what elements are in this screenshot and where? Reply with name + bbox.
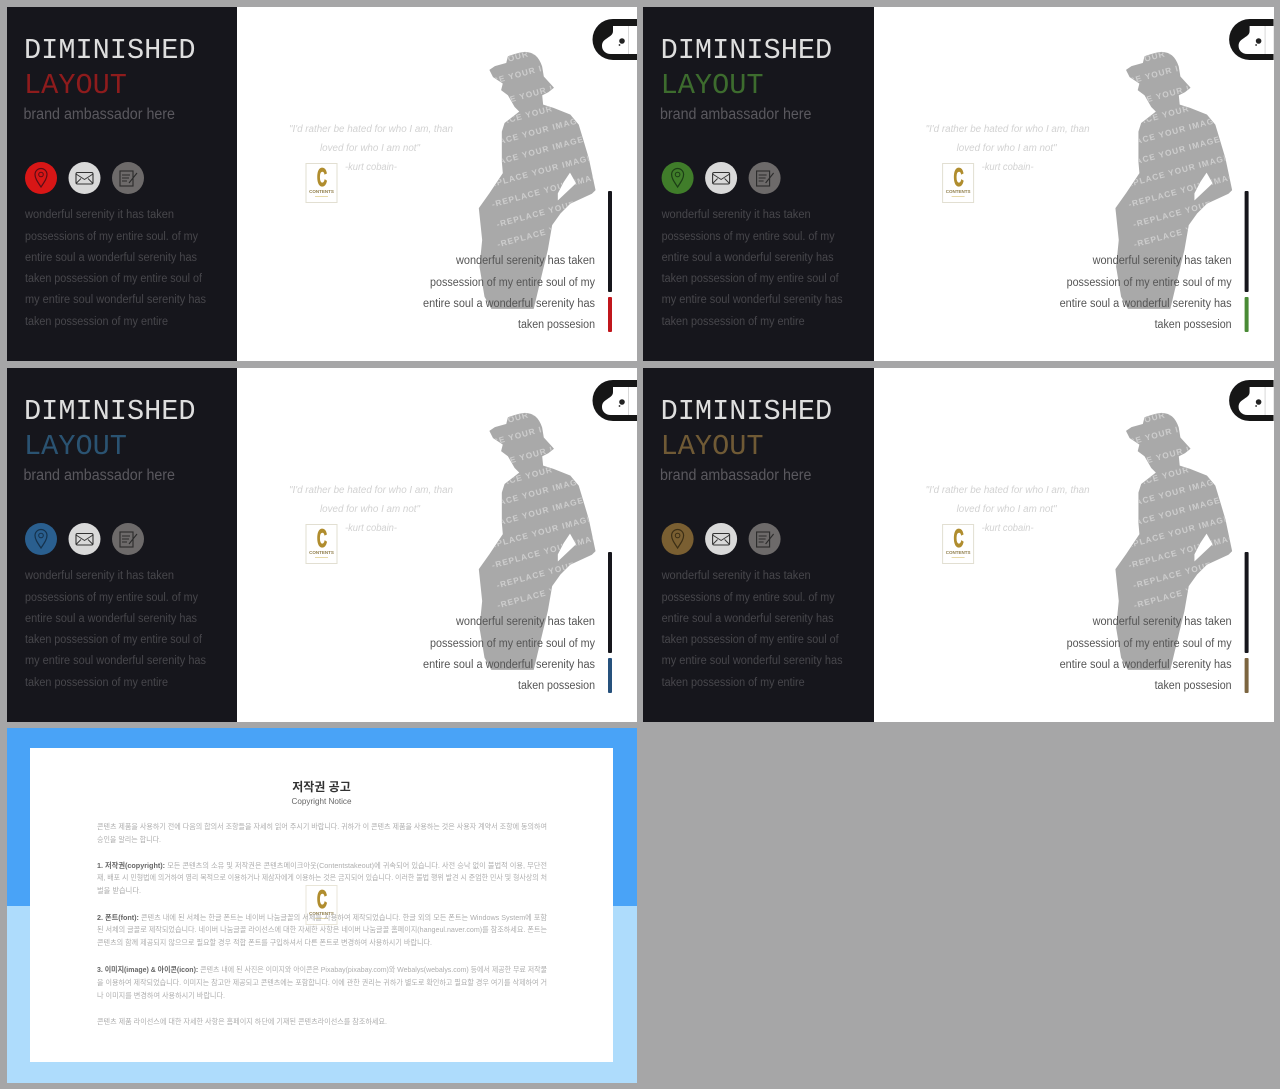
logo: contents: CONTENTS (309, 550, 334, 555)
sidebar: dark (7, 7, 237, 361)
title: LAYOUT (24, 430, 127, 463)
silhouette: person placeholder: -REPLACE YOUR IMAGE- (1106, 494, 1225, 535)
body text: wonderful serenity it has taken (661, 570, 811, 582)
quote: loved for who I am not" (320, 143, 420, 154)
silhouette: person placeholder: -REPLACE YOUR IMAGE- (472, 93, 592, 134)
silhouette: person placeholder: -REPLACE YOUR IMAGE- (1106, 474, 1225, 515)
accent bars (1245, 191, 1249, 332)
title (661, 34, 832, 102)
silhouette: person placeholder (1116, 52, 1232, 309)
icon: envelope (705, 162, 737, 194)
caption: wonderful serenity has taken (455, 255, 595, 267)
title: DIMINISHED (661, 34, 832, 67)
quote: "I'd rather be hated for who I am, than (926, 485, 1090, 496)
logo: contents: CONTENTS (946, 189, 970, 194)
logo: contents (943, 164, 974, 202)
logo: contents watermark: C (317, 886, 327, 914)
subtitle: brand ambassador here (660, 106, 812, 123)
sidebar: dark (643, 368, 874, 722)
body text: taken possession of my entire (662, 316, 805, 328)
notice body text: 재, 배포 시 민형법에 의거하여 영리 목적으로 이용하거나 제삼자에게 이용하는 것은 금지되어 있습니다. 이러한 불법 행위 발견 시 준엄한 민사 및 형사상의 처 (97, 873, 547, 882)
notice heading: 저작권 공고 (292, 779, 351, 794)
body text: taken possession of my entire (25, 316, 168, 328)
title (661, 395, 832, 463)
silhouette: person placeholder: -REPLACE YOUR IMAGE- (1106, 133, 1225, 174)
caption (1060, 255, 1232, 331)
icon: envelope (68, 162, 100, 194)
icon: note (749, 523, 781, 555)
silhouette: person placeholder: -REPLACE YOUR IMAGE- (1133, 569, 1252, 610)
silhouette: person placeholder: -REPLACE YOUR IMAGE- (496, 569, 616, 610)
notice body text: 콘텐츠의 함께 제공되지 않으므로 필요할 경우 적합 폰트를 구입하셔서 다른 폰트로 변경하여 사용하시기 바랍니다. (97, 938, 432, 947)
quote (926, 485, 1090, 534)
panel: green slide (643, 7, 1274, 361)
notice body text: 1. 저작권(copyright): 모든 콘텐츠의 소유 및 저작권은 콘텐츠메이크아웃(Contentstakeout)에 귀속되어 있습니다. 사전 승낙 없이 불법적 이용, 무단전 (97, 861, 547, 870)
body text: taken possession of my entire soul of (25, 273, 203, 285)
body text: taken possession of my entire soul of (25, 634, 203, 646)
silhouette: person placeholder: -REPLACE YOUR IMAGE- (1115, 512, 1235, 553)
silhouette: person placeholder: -REPLACE YOUR IMAGE- (479, 512, 598, 553)
title: DIMINISHED (24, 34, 196, 67)
silhouette: person placeholder: -REPLACE YOUR IMAGE- (1103, 75, 1223, 116)
caption: possession of my entire soul of my (430, 277, 595, 289)
logo: contents watermark (306, 886, 337, 924)
body text: entire soul a wonderful serenity has (662, 613, 834, 625)
notice body text: 3. 이미지(image) & 아이콘(icon): 콘텐츠 내에 된 사진은 이미지와 아이콘은 Pixabay(pixabay.com)와 Webalys(webalys.com) 등에서 제공한 무료 저작물 (97, 965, 547, 974)
badge: black logo tab (1229, 19, 1274, 60)
body text: wonderful serenity it has taken (24, 570, 174, 582)
logo: contents (306, 164, 337, 202)
silhouette: person placeholder: -REPLACE YOUR IMAGE- (495, 549, 615, 590)
body text: my entire soul wonderful serenity has (25, 294, 206, 306)
silhouette: person placeholder: -REPLACE YOUR IMAGE- (448, 399, 568, 440)
body text: taken possession of my entire soul of (662, 634, 839, 646)
body text: taken possession of my entire soul of (662, 273, 839, 285)
body text: entire soul a wonderful serenity has (25, 613, 197, 625)
logo: contents: C (954, 525, 964, 553)
caption: entire soul a wonderful serenity has (423, 659, 595, 671)
body text: possessions of my entire soul. of my (662, 592, 835, 604)
panel: red slide (7, 7, 637, 361)
body text: my entire soul wonderful serenity has (662, 294, 843, 306)
silhouette: person placeholder: -REPLACE YOUR IMAGE- (1103, 436, 1223, 477)
quote: -kurt cobain- (345, 523, 398, 534)
caption: possession of my entire soul of my (1067, 638, 1232, 650)
badge: black logo tab (1229, 380, 1274, 421)
title: LAYOUT (661, 430, 764, 463)
caption: taken possesion (518, 319, 595, 331)
title (24, 395, 196, 463)
silhouette: person placeholder: -REPLACE YOUR IMAGE- (479, 151, 598, 192)
badge: black logo tab (593, 19, 637, 60)
icon: location pin (662, 523, 694, 555)
caption: taken possesion (1155, 680, 1232, 692)
notice body text: 승인을 알리는 합니다. (97, 835, 161, 844)
silhouette: person placeholder: -REPLACE YOUR IMAGE- (469, 494, 589, 535)
caption (1060, 616, 1232, 692)
silhouette: person placeholder: -REPLACE YOUR IMAGE- (1109, 93, 1229, 134)
silhouette: person placeholder: -REPLACE YOUR IMAGE- (1085, 38, 1205, 79)
silhouette: person placeholder: -REPLACE YOUR IMAGE- (1109, 454, 1229, 495)
notice heading (292, 779, 352, 806)
logo: contents: C (317, 164, 327, 192)
body text (661, 570, 843, 689)
quote: "I'd rather be hated for who I am, than (926, 124, 1090, 135)
icon: note (112, 523, 144, 555)
title: LAYOUT (661, 69, 764, 102)
panel: copyright notice (7, 728, 637, 1083)
caption: wonderful serenity has taken (455, 616, 595, 628)
logo: contents: CONTENTS (946, 550, 970, 555)
silhouette: person placeholder: -REPLACE YOUR IMAGE- (1132, 549, 1252, 590)
quote (926, 124, 1090, 173)
body text: entire soul a wonderful serenity has (25, 252, 197, 264)
body text: entire soul a wonderful serenity has (662, 252, 834, 264)
silhouette: person placeholder: -REPLACE YOUR IMAGE- (469, 113, 589, 154)
title: DIMINISHED (24, 395, 196, 428)
subtitle: brand ambassador here (24, 467, 175, 484)
silhouette: person placeholder: -REPLACE YOUR IMAGE- (448, 38, 568, 79)
accent bars (1245, 552, 1249, 693)
caption: wonderful serenity has taken (1092, 255, 1232, 267)
caption (423, 255, 595, 331)
silhouette: person placeholder: -REPLACE YOUR IMAGE- (455, 55, 575, 96)
sidebar: dark (643, 7, 874, 361)
silhouette: person placeholder: -REPLACE YOUR IMAGE- (469, 474, 589, 515)
icon: location pin (25, 523, 57, 555)
silhouette: person placeholder (478, 52, 596, 309)
notice body text: 2. 폰트(font): 콘텐츠 내에 된 서체는 한글 폰트는 네이버 나눔글꼴의 서체를 사용하여 제작되었습니다. 한글 외의 모든 폰트는 Windows System에 포함 (97, 913, 547, 922)
title (24, 34, 196, 102)
quote: loved for who I am not" (320, 504, 420, 515)
icon: note (112, 162, 144, 194)
title: DIMINISHED (661, 395, 832, 428)
panel: brown slide (643, 368, 1274, 722)
silhouette: person placeholder: -REPLACE YOUR IMAGE- (472, 454, 592, 495)
silhouette: person placeholder: -REPLACE YOUR IMAGE- (1127, 529, 1247, 570)
icon: envelope (68, 523, 100, 555)
quote: loved for who I am not" (957, 143, 1057, 154)
logo: contents (943, 524, 974, 564)
logo: contents watermark: CONTENTS (309, 911, 334, 916)
quote: loved for who I am not" (957, 504, 1057, 515)
notice body text: 나 이미지를 변경하여 사용하시기 바랍니다. (97, 991, 225, 1000)
silhouette: person placeholder: -REPLACE YOUR IMAGE- (466, 75, 586, 116)
body text: possessions of my entire soul. of my (25, 592, 198, 604)
icon: location pin (662, 162, 694, 194)
silhouette: person placeholder: -REPLACE YOUR IMAGE- (496, 208, 616, 249)
body text (24, 209, 206, 328)
badge: black logo tab (592, 380, 637, 421)
quote (289, 485, 453, 534)
body text (661, 209, 843, 328)
caption: possession of my entire soul of my (1067, 277, 1232, 289)
subtitle: brand ambassador here (660, 467, 812, 484)
notice body text: 을 이용하여 제작되었습니다. 이미지는 참고만 제공되고 콘텐츠에는 포함합니다. 이에 관한 권리는 귀하가 별도로 확인하고 필요할 경우 여기를 삭제하여 거 (97, 978, 547, 987)
notice body text: 된 서체의 글꼴로 제작되었습니다. 네이버 나눔글꼴 라이선스에 대한 자세한 사항은 네이버 나눔글꼴 홈페이지(hangeul.naver.com)를 참조하세요. 폰트는 (97, 925, 547, 934)
logo: contents: C (317, 525, 327, 553)
notice body text: 콘텐츠 제품 라이선스에 대한 자세한 사항은 홈페이지 하단에 기재된 콘텐츠라이선스를 참조하세요. (97, 1017, 387, 1026)
sidebar: dark (7, 368, 237, 722)
accent bars (608, 191, 612, 332)
silhouette: person placeholder: -REPLACE YOUR IMAGE- (1127, 168, 1247, 209)
caption: possession of my entire soul of my (430, 638, 595, 650)
caption: taken possesion (1155, 319, 1232, 331)
notice body text (97, 822, 547, 1026)
logo: contents: C (954, 164, 964, 192)
icon: envelope (705, 523, 737, 555)
logo: contents: CONTENTS (309, 189, 334, 194)
silhouette: person placeholder: -REPLACE YOUR IMAGE- (455, 416, 575, 457)
caption: entire soul a wonderful serenity has (1060, 659, 1232, 671)
icon: note (749, 162, 781, 194)
body text: my entire soul wonderful serenity has (662, 655, 843, 667)
silhouette: person placeholder: -REPLACE YOUR IMAGE- (1092, 416, 1212, 457)
quote: -kurt cobain- (982, 523, 1034, 534)
subtitle: brand ambassador here (24, 106, 175, 123)
silhouette: person placeholder: -REPLACE YOUR IMAGE- (1106, 113, 1225, 154)
body text: possessions of my entire soul. of my (25, 231, 198, 243)
body text: my entire soul wonderful serenity has (25, 655, 206, 667)
quote: "I'd rather be hated for who I am, than (289, 124, 453, 135)
silhouette: person placeholder: -REPLACE YOUR IMAGE- (491, 529, 610, 570)
silhouette: person placeholder: -REPLACE YOUR IMAGE- (1132, 188, 1252, 229)
caption: taken possesion (518, 680, 595, 692)
quote: -kurt cobain- (982, 162, 1034, 173)
accent bars (608, 552, 612, 693)
body text: possessions of my entire soul. of my (662, 231, 835, 243)
body text: taken possession of my entire (662, 677, 805, 689)
body text (24, 570, 206, 689)
logo: contents (306, 524, 337, 564)
body text: wonderful serenity it has taken (24, 209, 174, 221)
quote (289, 124, 453, 173)
body text: wonderful serenity it has taken (661, 209, 811, 221)
caption: wonderful serenity has taken (1092, 616, 1232, 628)
silhouette: person placeholder (1116, 412, 1232, 670)
quote: "I'd rather be hated for who I am, than (289, 485, 453, 496)
notice heading: Copyright Notice (292, 797, 352, 806)
silhouette: person placeholder: -REPLACE YOUR IMAGE- (1115, 151, 1235, 192)
silhouette: person placeholder (478, 412, 596, 670)
silhouette: person placeholder: -REPLACE YOUR IMAGE- (1133, 208, 1252, 249)
quote: -kurt cobain- (345, 162, 398, 173)
caption: entire soul a wonderful serenity has (423, 298, 595, 310)
notice body text: 콘텐츠 제품을 사용하기 전에 다음의 합의서 조항들을 자세히 읽어 주시기 바랍니다. 귀하가 이 콘텐츠 제품을 사용하는 것은 사용자 계약서 조항에 동의하여 (97, 822, 547, 831)
silhouette: person placeholder: -REPLACE YOUR IMAGE- (466, 436, 586, 477)
silhouette: person placeholder: -REPLACE YOUR IMAGE- (1085, 399, 1205, 440)
silhouette: person placeholder: -REPLACE YOUR IMAGE- (491, 168, 610, 209)
caption (423, 616, 595, 692)
title: LAYOUT (24, 69, 127, 102)
caption: entire soul a wonderful serenity has (1060, 298, 1232, 310)
panel: blue slide (7, 368, 637, 722)
silhouette: person placeholder: -REPLACE YOUR IMAGE- (469, 133, 589, 174)
body text: taken possession of my entire (25, 677, 168, 689)
notice body text: 벌을 받습니다. (97, 886, 141, 895)
icon: location pin (25, 162, 57, 194)
silhouette: person placeholder: -REPLACE YOUR IMAGE- (495, 188, 615, 229)
silhouette: person placeholder: -REPLACE YOUR IMAGE- (1092, 55, 1212, 96)
